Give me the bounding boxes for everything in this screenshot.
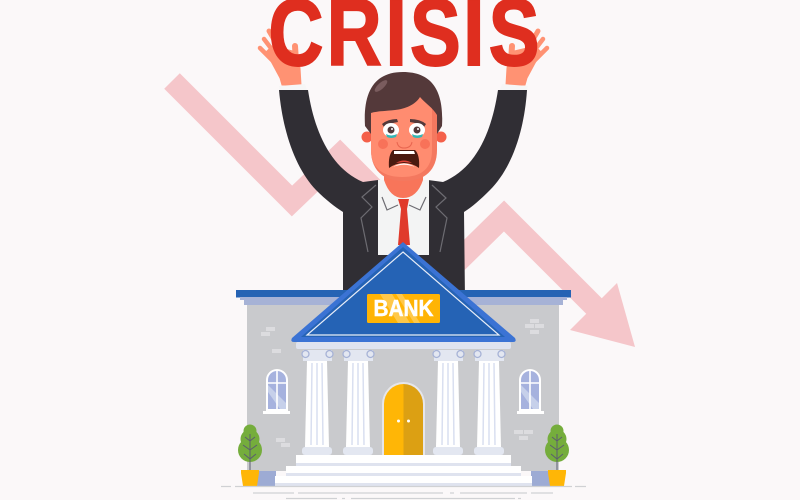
window left bbox=[263, 369, 290, 414]
icon: right hand bbox=[506, 31, 547, 85]
tie bbox=[398, 199, 410, 245]
eyes bbox=[383, 123, 425, 138]
shirt bbox=[378, 180, 429, 255]
entablature bbox=[296, 342, 511, 349]
man: panicking banker bbox=[260, 31, 547, 300]
face bbox=[371, 95, 432, 177]
pediment roof bbox=[291, 242, 516, 342]
bank sign: BANK bbox=[374, 295, 434, 321]
eyebrows bbox=[382, 119, 426, 127]
shirt cuffs bbox=[279, 84, 528, 91]
columns bbox=[302, 350, 505, 455]
plant left bbox=[238, 424, 262, 486]
window right bbox=[517, 369, 544, 414]
cornice bbox=[240, 297, 567, 305]
door bbox=[382, 382, 425, 455]
icon: left hand bbox=[260, 31, 301, 85]
plant right bbox=[545, 424, 569, 486]
side plinths bbox=[256, 471, 551, 486]
face shadow edge bbox=[371, 95, 437, 181]
steps bbox=[275, 455, 532, 486]
column 1 bbox=[302, 350, 333, 455]
mouth bbox=[389, 150, 419, 168]
roof bar bbox=[236, 290, 571, 298]
jacket bbox=[279, 90, 527, 300]
head bbox=[362, 72, 446, 181]
hair highlight bbox=[373, 78, 389, 94]
bank building bbox=[221, 242, 586, 498]
ears bbox=[362, 132, 372, 142]
cheeks bbox=[378, 139, 388, 149]
nose bbox=[397, 142, 412, 148]
hair bbox=[365, 72, 442, 134]
jacket lapels bbox=[361, 185, 447, 252]
ground lines bbox=[221, 486, 586, 498]
neck bbox=[384, 170, 423, 198]
column 4 bbox=[474, 350, 505, 455]
wall bricks bbox=[261, 319, 544, 447]
column 2 bbox=[343, 350, 374, 455]
arrow: falling trend bbox=[172, 81, 635, 347]
wall bbox=[247, 305, 559, 471]
column 3 bbox=[433, 350, 464, 455]
